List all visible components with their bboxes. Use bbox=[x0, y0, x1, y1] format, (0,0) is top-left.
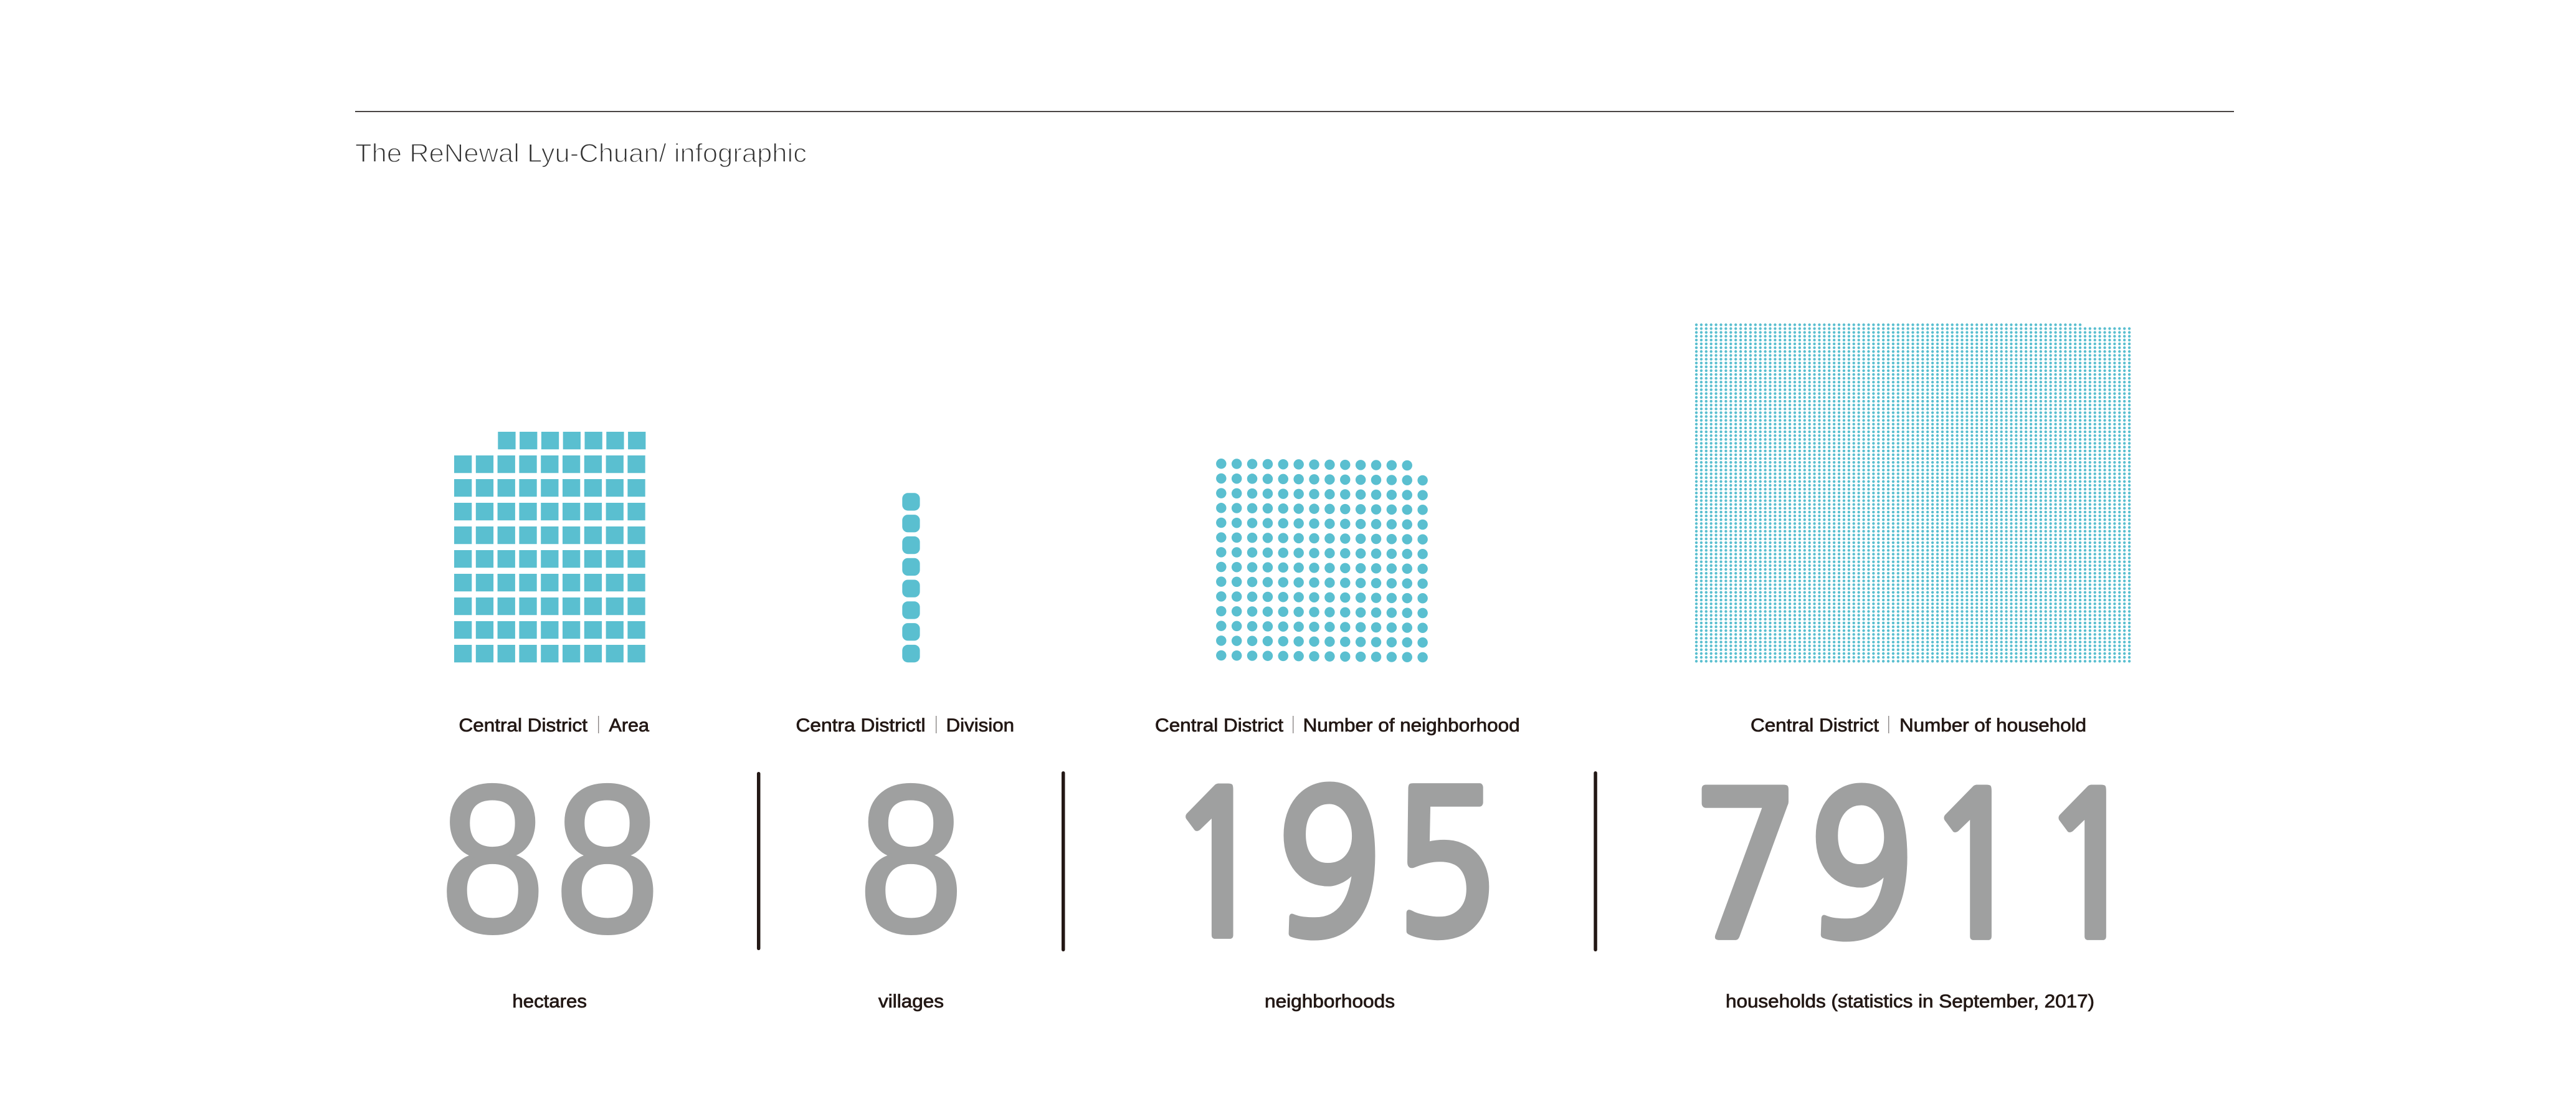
label: central district area bbox=[459, 715, 649, 736]
panel: area bbox=[440, 440, 660, 1012]
panel: neighborhoods bbox=[1155, 464, 1520, 1012]
divider 2 bbox=[1062, 771, 1065, 951]
number: 8: 8 bbox=[858, 741, 964, 976]
icon: 88 squares grid bbox=[454, 440, 647, 654]
number: 7911: 7911 bbox=[1691, 769, 2146, 968]
icon: 195 dots grid bbox=[1221, 464, 1423, 657]
number: 195: 195 bbox=[1164, 768, 1499, 967]
divider 3 bbox=[1594, 771, 1597, 951]
title: The ReNewal Lyu-Chuan/ infographic bbox=[355, 138, 807, 168]
unit: households: households (statistics in September, 2017) bbox=[1726, 991, 2094, 1012]
label: central district number of neighborhood: Number of neighborhood bbox=[1303, 715, 1520, 736]
divider 1 bbox=[757, 772, 760, 950]
label: central district number of neighborhood: Central District bbox=[1155, 715, 1284, 736]
label: central district number of household: Central District bbox=[1751, 715, 1880, 736]
label: central district number of neighborhood bbox=[1155, 715, 1520, 736]
label: central district number of household bbox=[1751, 715, 2086, 736]
number: 88: 88 bbox=[440, 741, 660, 976]
panel: division bbox=[796, 493, 1014, 1012]
label: central district division: Centra Districtl bbox=[796, 715, 926, 736]
unit: hectares: hectares bbox=[512, 991, 587, 1012]
header rule bbox=[355, 111, 2234, 112]
label: central district number of household: Number of household bbox=[1899, 715, 2086, 736]
panel: households bbox=[1691, 325, 2146, 1012]
icon: 8 rounded squares column bbox=[902, 493, 920, 662]
label: central district division bbox=[796, 715, 1014, 736]
unit: neighborhoods: neighborhoods bbox=[1265, 991, 1395, 1012]
label: central district area: Area bbox=[609, 715, 649, 736]
label: central district division: Division bbox=[946, 715, 1014, 736]
unit: villages: villages bbox=[878, 991, 944, 1012]
icon: 7911 dots grid bbox=[1696, 325, 2130, 661]
label: central district area: Central District bbox=[459, 715, 588, 736]
